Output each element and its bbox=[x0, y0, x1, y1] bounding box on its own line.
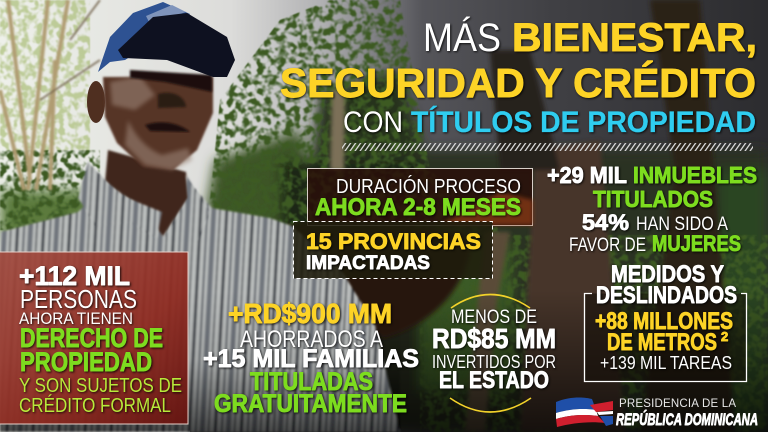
arm and hand bbox=[285, 224, 472, 338]
callout: inversión del estado: MENOS DE bbox=[451, 307, 537, 328]
panel: 15 provincias bbox=[294, 222, 492, 278]
icon: dominican flag bbox=[556, 397, 613, 427]
panel: duración del proceso bbox=[308, 168, 533, 226]
text block: inmuebles titulados: TITULADOS bbox=[593, 186, 713, 212]
mouth bbox=[145, 122, 190, 132]
panel: 15 provincias: 15 PROVINCIAS bbox=[306, 229, 481, 254]
panel: medidos y deslindados: MEDIDOS Y bbox=[611, 261, 724, 288]
callout: inversión del estado: EL ESTADO bbox=[439, 367, 549, 394]
face bbox=[103, 77, 213, 170]
logo: Presidencia de la República Dominicana bbox=[556, 397, 758, 429]
panel: duración del proceso: AHORA 2-8 MESES bbox=[315, 194, 521, 221]
shirt collar bbox=[78, 162, 210, 240]
title bbox=[280, 15, 757, 139]
panel: derecho de propiedad: PERSONAS bbox=[20, 284, 137, 314]
cap bbox=[98, 2, 190, 72]
panel: medidos y deslindados bbox=[584, 261, 746, 382]
top arc bbox=[451, 294, 530, 308]
bare tree branches bbox=[0, 0, 100, 190]
panel: medidos y deslindados: DE METROS bbox=[607, 329, 717, 356]
nose bbox=[158, 93, 186, 108]
bottom arc bbox=[450, 398, 531, 412]
text block: inmuebles titulados: INMUEBLES bbox=[633, 162, 757, 188]
eye shadow bbox=[130, 70, 212, 92]
text block: inmuebles titulados: 54% bbox=[582, 210, 629, 235]
panel: familias tituladas: AHORRADOS A bbox=[240, 326, 383, 353]
text block: inmuebles titulados: +29 MIL bbox=[547, 162, 627, 188]
panel: 15 provincias: IMPACTADAS bbox=[306, 253, 430, 274]
panel: familias tituladas: +15 MIL FAMILIAS bbox=[203, 345, 419, 373]
panel: medidos y deslindados: +139 MIL TAREAS bbox=[600, 353, 732, 373]
panel: medidos y deslindados: +88 MILLONES bbox=[595, 308, 733, 335]
text block: inmuebles titulados bbox=[547, 162, 757, 256]
logo: Presidencia de la República Dominicana: PRESIDENCIA DE LA bbox=[619, 398, 736, 410]
neck bbox=[105, 150, 188, 236]
cap logo bbox=[146, 5, 186, 24]
title line 2: SEGURIDAD Y CRÉDITO bbox=[280, 60, 756, 106]
panel: familias tituladas: GRATUITAMENTE bbox=[214, 390, 407, 418]
panel: derecho de propiedad bbox=[0, 252, 188, 424]
title line 1: BIENESTAR, bbox=[512, 16, 757, 60]
panel: derecho de propiedad: AHORA TIENEN bbox=[19, 309, 133, 328]
panel: derecho de propiedad: Y SON SUJETOS DE bbox=[19, 375, 182, 397]
panel: medidos y deslindados: DESLINDADOS bbox=[596, 282, 737, 309]
panel: familias tituladas: TITULADAS bbox=[250, 368, 373, 396]
panel: familias tituladas bbox=[203, 298, 419, 418]
text block: inmuebles titulados: HAN SIDO A bbox=[636, 214, 728, 235]
panel: derecho de propiedad: PROPIEDAD bbox=[20, 347, 152, 377]
panel: derecho de propiedad: +112 MIL bbox=[19, 261, 130, 291]
callout: inversión del estado bbox=[432, 294, 556, 412]
photo: elderly man with cap and striped shirt bbox=[0, 2, 472, 432]
callout: inversión del estado: INVERTIDOS POR bbox=[432, 352, 556, 372]
shirt bbox=[0, 170, 400, 432]
callout: inversión del estado: RD$85 MM bbox=[432, 323, 556, 354]
title line 3: TÍTULOS DE PROPIEDAD bbox=[411, 105, 756, 139]
title line 1: MÁS bbox=[423, 15, 501, 60]
text block: inmuebles titulados: MUJERES bbox=[652, 231, 741, 256]
cap brim bbox=[118, 13, 235, 77]
panel: derecho de propiedad: DERECHO DE bbox=[20, 323, 163, 353]
title line 3: CON bbox=[343, 106, 403, 139]
panel: derecho de propiedad: CRÉDITO FORMAL bbox=[19, 394, 171, 417]
panel: duración del proceso: DURACIÓN PROCESO bbox=[336, 175, 521, 198]
tree trunks bbox=[330, 0, 735, 432]
ear bbox=[87, 81, 105, 123]
panel: medidos y deslindados: 2 bbox=[721, 329, 728, 344]
face highlights bbox=[110, 76, 192, 170]
text block: inmuebles titulados: FAVOR DE bbox=[569, 235, 646, 256]
panel: familias tituladas: +RD$900 MM bbox=[228, 298, 392, 329]
